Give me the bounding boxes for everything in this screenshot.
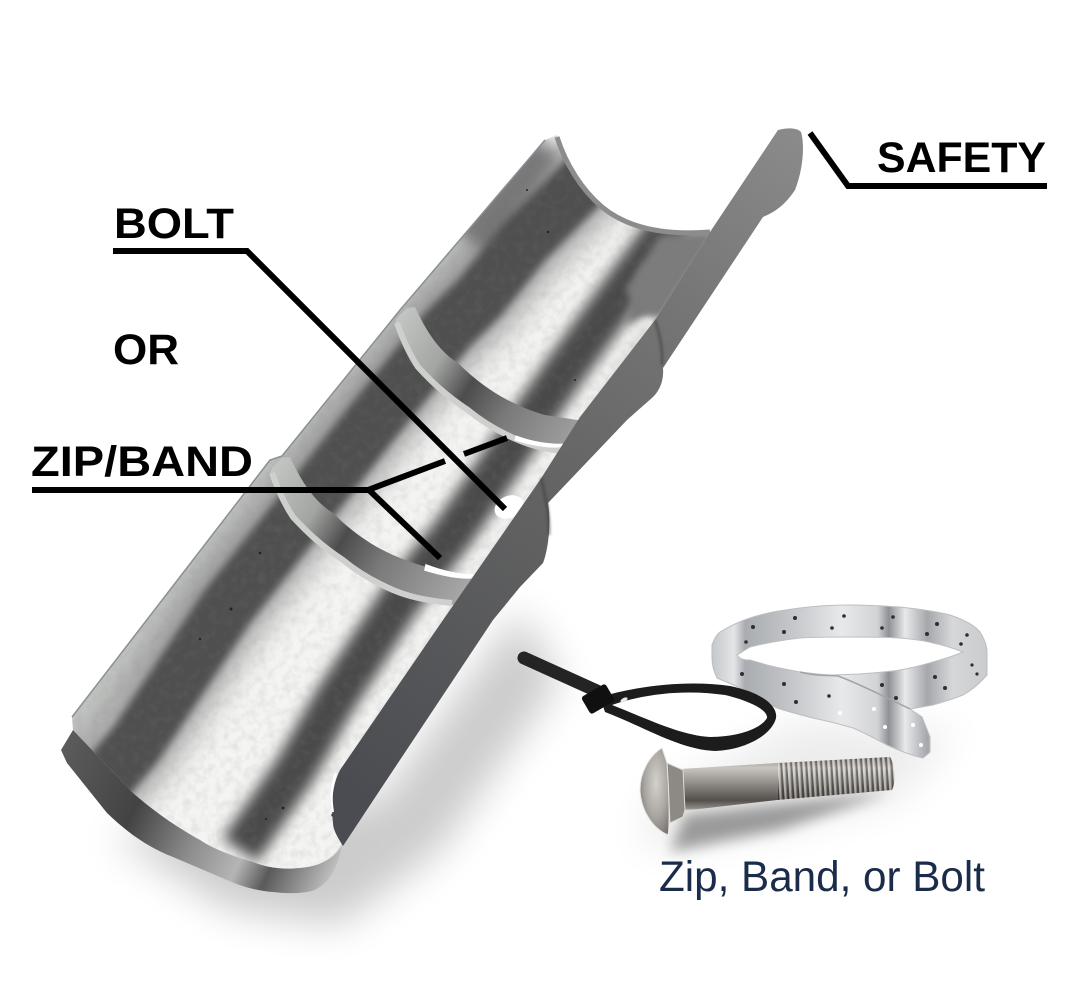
pipe inner surface <box>72 135 708 868</box>
label: ZIP/BAND: ZIP/BAND <box>31 438 253 486</box>
zip tie <box>524 658 776 751</box>
bottom lip <box>61 730 342 893</box>
split pipe illustration <box>40 110 820 893</box>
bolt square neck <box>667 763 685 823</box>
upper slit <box>515 436 565 447</box>
label: SAFETY: SAFETY <box>877 134 1046 182</box>
bolt hole <box>491 491 527 523</box>
caption: Zip, Band, or Bolt <box>659 853 985 901</box>
specks on pipe surface <box>199 189 611 820</box>
lower slit <box>425 565 473 578</box>
soft shadow beneath pipe <box>110 610 560 925</box>
pipe left edge <box>72 140 545 717</box>
leader line: BOLT <box>113 251 505 509</box>
band holes <box>740 614 979 704</box>
bolt shadow <box>670 792 892 852</box>
bolt shank <box>680 757 894 811</box>
leader line: SAFETY <box>810 133 1047 186</box>
upper end lip <box>557 137 710 233</box>
zip tie head <box>581 683 615 715</box>
label: OR: OR <box>113 326 179 374</box>
bolt thread <box>778 757 894 800</box>
band end holes <box>838 707 923 747</box>
wall rib creases <box>541 320 662 535</box>
leader lines: ZIP/BAND <box>32 438 507 558</box>
zip tie eye <box>620 696 628 704</box>
perforated metal band <box>712 605 987 758</box>
overlapping strap edge <box>800 672 910 709</box>
pipe right wall <box>332 128 803 846</box>
zip tie tail <box>524 658 597 691</box>
carriage bolt <box>640 748 894 852</box>
zip tie loop <box>600 683 776 751</box>
band coil <box>712 605 987 758</box>
bolt domed head <box>640 748 669 835</box>
wall highlight at base <box>332 773 336 812</box>
upper rib <box>395 307 590 455</box>
soft shadow beneath fixings <box>640 720 960 850</box>
lower rib <box>270 457 475 605</box>
label: BOLT: BOLT <box>114 200 234 248</box>
